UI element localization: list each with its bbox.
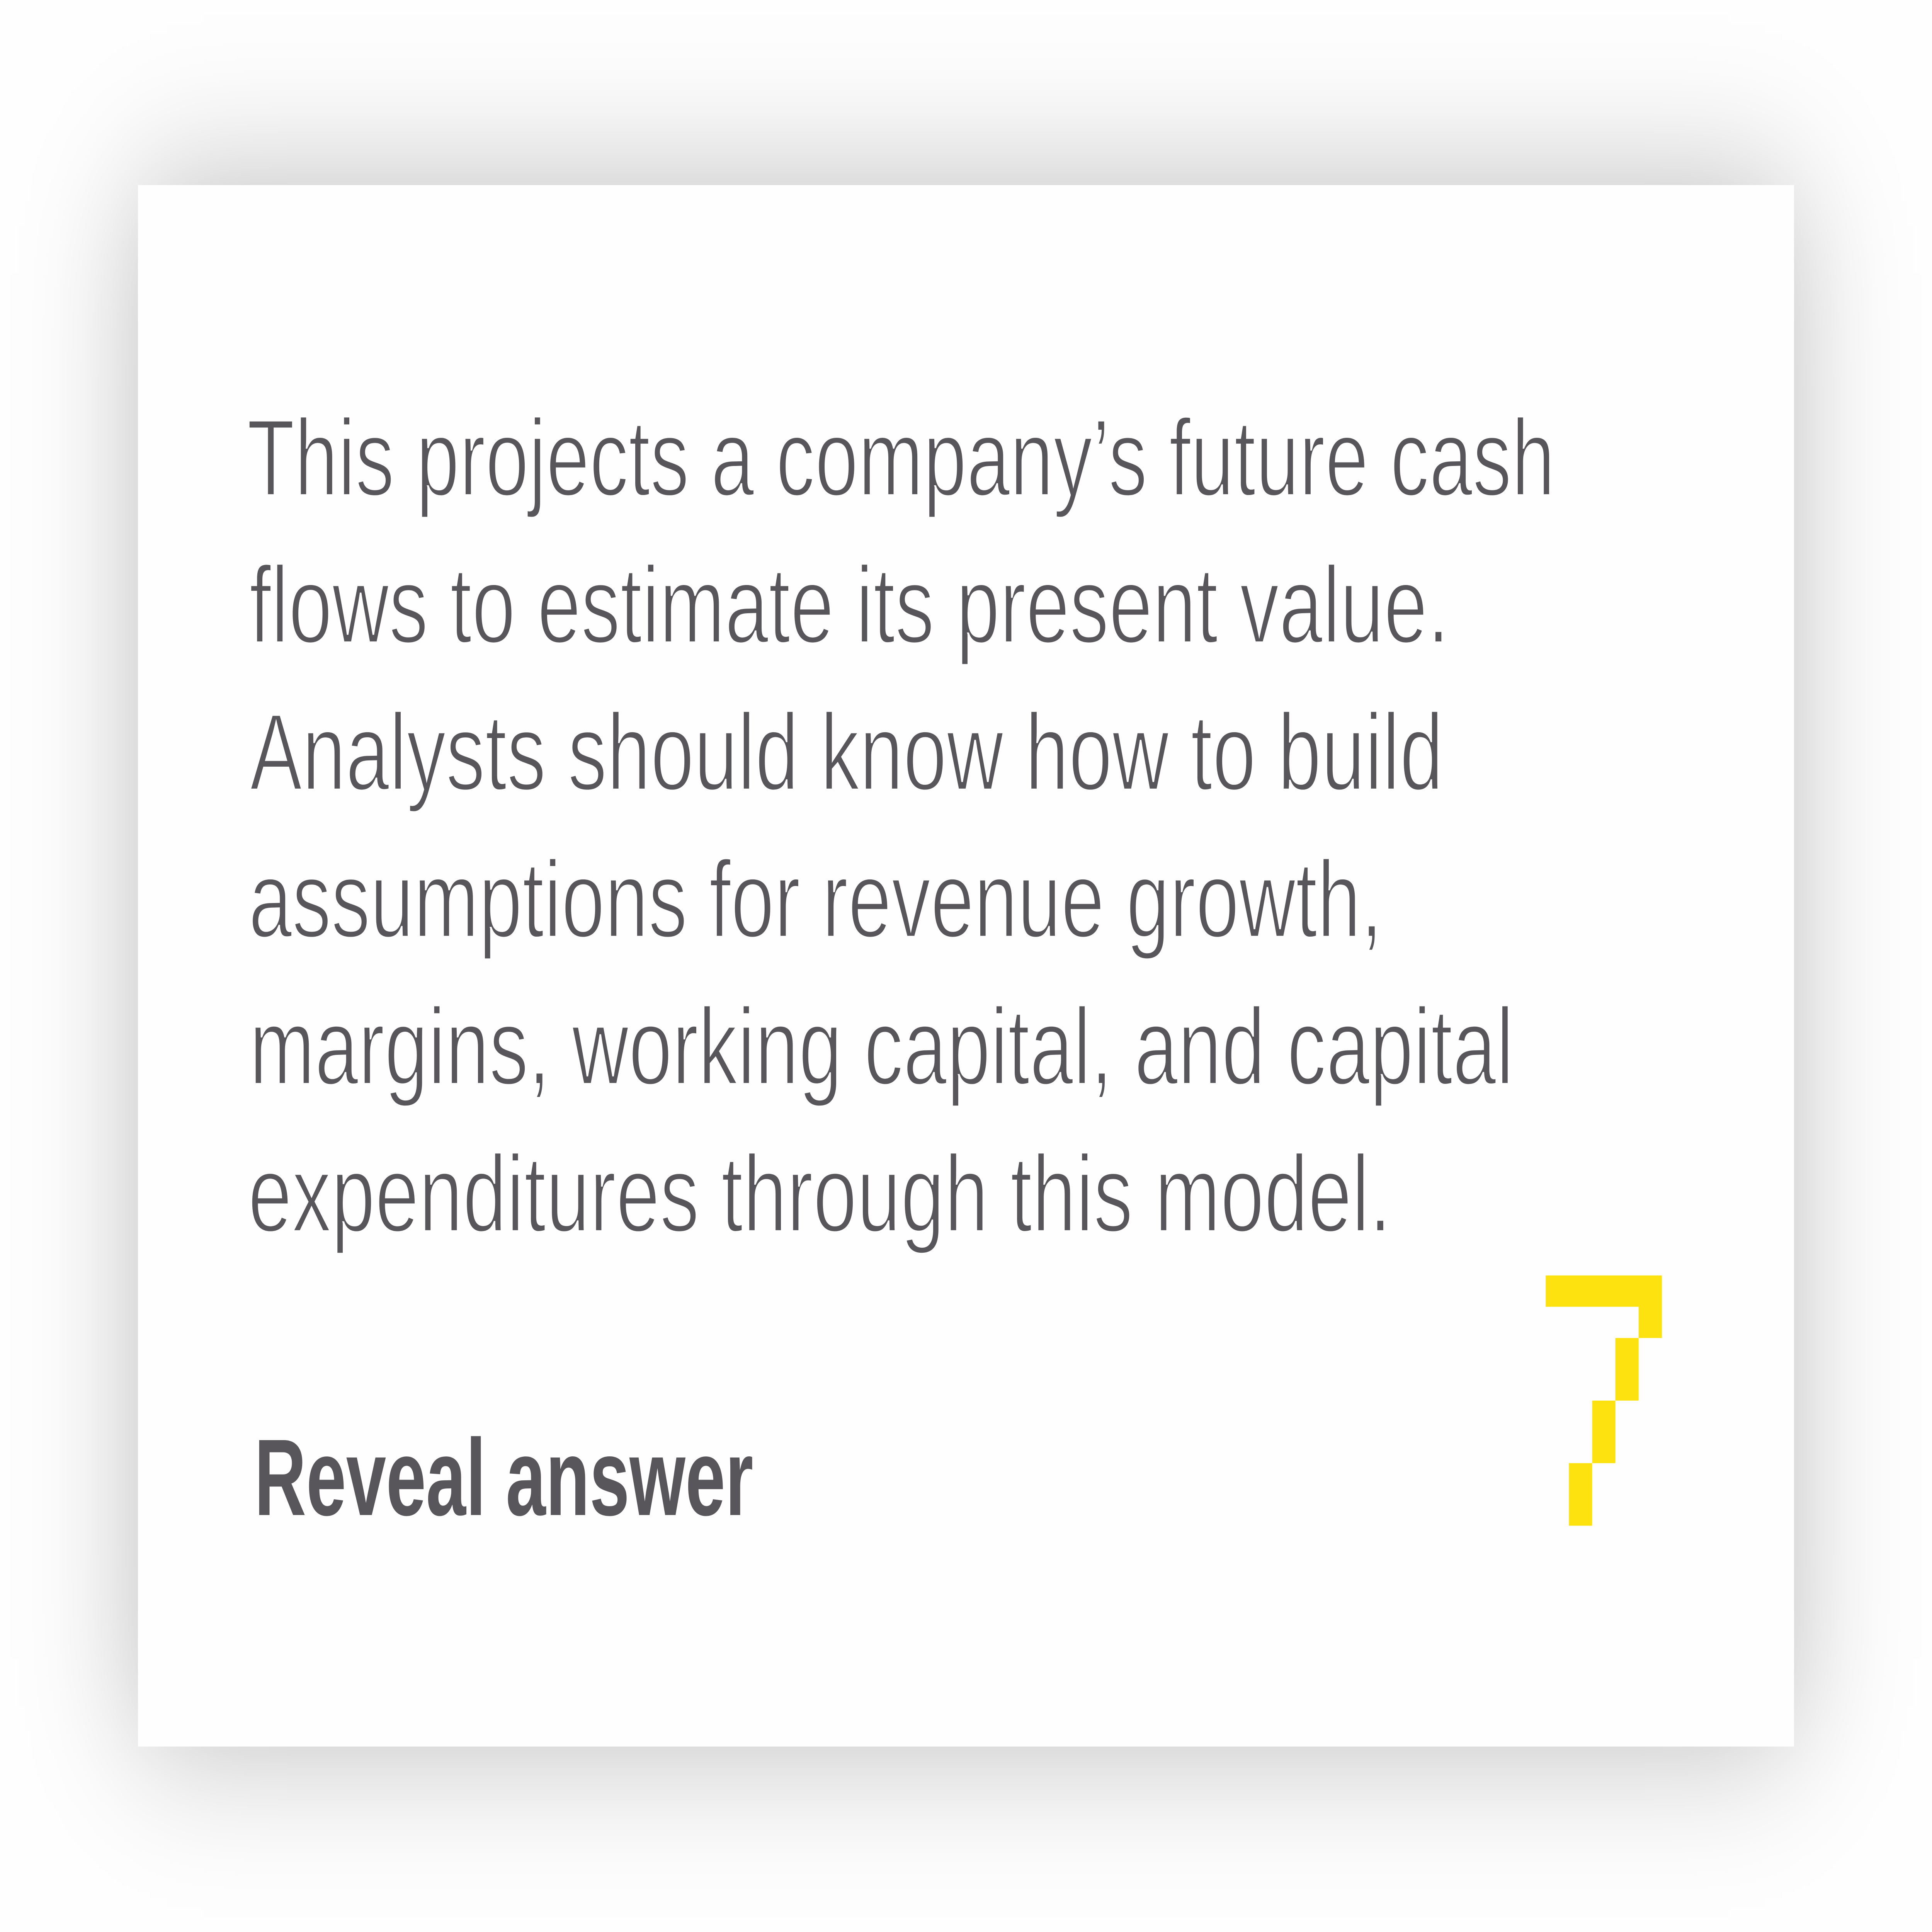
question text: expenditures through this model.	[248, 1133, 1391, 1255]
reveal answer label: Reveal answer	[254, 1416, 753, 1538]
question text	[247, 396, 1555, 1255]
icon: yellow pixel number seven	[1546, 1276, 1662, 1526]
question text: assumptions for revenue growth,	[248, 838, 1382, 960]
question text: This projects a company’s future cash	[247, 396, 1555, 519]
question text: margins, working capital, and capital	[249, 985, 1514, 1107]
panel: question card	[138, 185, 1794, 1747]
question text: Analysts should know how to build	[250, 691, 1443, 813]
question text: flows to estimate its present value.	[249, 544, 1449, 666]
